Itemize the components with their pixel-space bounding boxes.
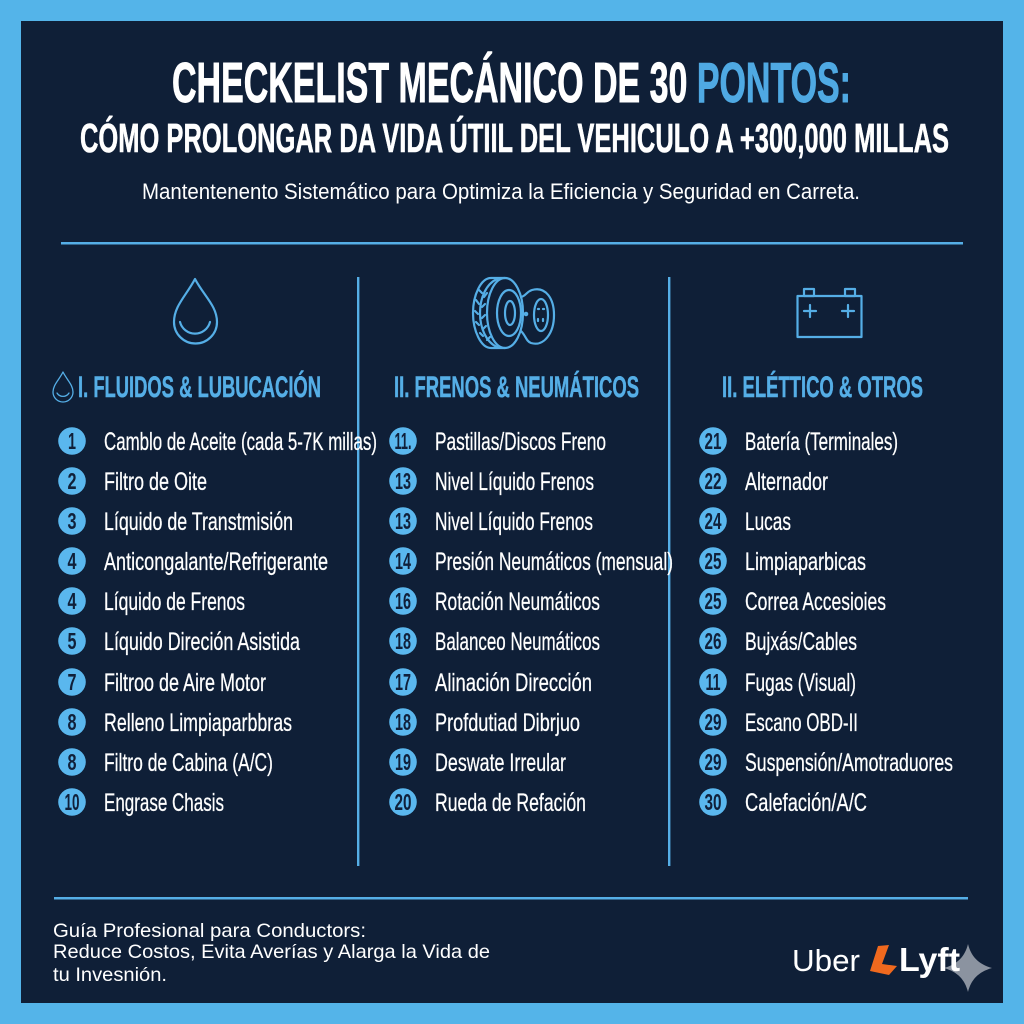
item 17: 17 [395, 669, 411, 695]
item 13b [389, 507, 593, 536]
item 10: 10 [64, 789, 80, 815]
item 11b [699, 668, 856, 697]
item 29b: 29 [704, 749, 722, 775]
item 22: Alternador [745, 468, 828, 496]
heading: frenos: II. FRENOS & NEUMÁTICOS [394, 370, 639, 404]
item 8b [58, 748, 273, 777]
footer text [53, 920, 490, 986]
item 4b: Líquido de Frenos [104, 588, 245, 616]
item 2: Filtro de Oite [104, 468, 207, 496]
icon: small water drop [53, 372, 73, 402]
item 22: 22 [704, 468, 722, 494]
item 8 [58, 708, 292, 737]
item 25b [699, 587, 886, 616]
item 7: Filtroo de Aire Motor [104, 669, 266, 697]
item 3: Líquido de Transtmisión [104, 508, 293, 536]
item 29b [699, 748, 953, 777]
item 25b: Correa Accesioies [745, 588, 886, 616]
footer text: tu Invesnión. [53, 964, 167, 986]
star mark [944, 944, 992, 992]
item 18b: 18 [395, 709, 411, 735]
item 30 [699, 788, 867, 817]
item 8b: 8 [68, 749, 77, 775]
item 5: 5 [68, 628, 77, 654]
item 4: Anticongalante/Refrigerante [104, 548, 328, 576]
Lyft icon [870, 945, 897, 975]
item 26: 26 [704, 628, 722, 654]
item 29 [699, 708, 858, 737]
item 7 [58, 668, 266, 697]
footer text: Guía Profesional para Conductors: [53, 920, 366, 942]
item 8b: Filtro de Cabina (A/C) [104, 749, 273, 777]
item 4: 4 [68, 548, 77, 574]
item 18b [389, 708, 580, 737]
item 14 [389, 547, 673, 576]
panel: fluidos [53, 279, 377, 817]
item 3: 3 [68, 508, 76, 534]
item 8: 8 [68, 709, 77, 735]
item 18b: Profdutiad Dibrjuo [435, 709, 580, 737]
item 7: 7 [68, 669, 76, 695]
item 19: 19 [395, 749, 411, 775]
item 16: 16 [395, 588, 411, 614]
item 13b: 13 [395, 508, 411, 534]
item 10: Engrase Chasis [104, 789, 224, 817]
item 18: 18 [395, 628, 411, 654]
panel: electrico [699, 289, 953, 817]
item 3 [58, 507, 293, 536]
item 11b: Fugas (Visual) [745, 669, 856, 697]
tagline: Mantentenento Sistemático para Optimiza la Eficiencia y Seguridad en Carreta. [142, 179, 860, 204]
item 22 [699, 467, 828, 496]
item 20 [389, 788, 586, 817]
item 21: Batería (Terminales) [745, 428, 898, 456]
Lyft wordmark: Lyft [899, 941, 960, 978]
item 13: 13 [395, 468, 411, 494]
item 21 [699, 427, 898, 456]
item 4b: 4 [68, 588, 77, 614]
item 26 [699, 627, 857, 656]
item 11b: 11 [706, 669, 721, 695]
item 24 [699, 507, 791, 536]
item 29: Escano OBD-II [745, 709, 858, 737]
icon: water drop [174, 279, 217, 344]
item 16 [389, 587, 600, 616]
item 20: Rueda de Refación [435, 789, 586, 817]
item 5: Líquido Direción Asistida [104, 628, 300, 656]
item 14: 14 [395, 548, 411, 574]
item 18 [389, 627, 600, 656]
item 8: Relleno Limpiaparbbras [104, 709, 292, 737]
item 20: 20 [394, 789, 412, 815]
Uber wordmark: Uber [792, 943, 860, 978]
item 11: Pastillas/Discos Freno [435, 428, 606, 456]
item 2: 2 [68, 468, 76, 494]
item 11 [389, 427, 606, 456]
item 4 [58, 547, 328, 576]
item 1: Camblo de Aceite (cada 5-7K millas) [104, 428, 377, 456]
item 5 [58, 627, 300, 656]
item 18: Balanceo Neumáticos [435, 628, 600, 656]
item 21: 21 [704, 428, 722, 454]
item 1: 1 [68, 428, 76, 454]
item 25: Limpiaparbicas [745, 548, 866, 576]
item 10 [58, 788, 224, 817]
icon: battery [798, 289, 862, 337]
logos: Uber and Lyft [792, 941, 992, 992]
item 30: 30 [704, 789, 722, 815]
item 24: 24 [704, 508, 722, 534]
item 24: Lucas [745, 508, 791, 536]
item 25 [699, 547, 866, 576]
item 14: Presión Neumáticos (mensual) [435, 548, 673, 576]
item 29: 29 [704, 709, 722, 735]
footer text: Reduce Costos, Evita Averías y Alarga la Vida de [53, 941, 490, 963]
heading: fluidos: I. FLUIDOS & LUBUCACIÓN [78, 370, 321, 404]
panel: frenos [389, 278, 673, 817]
item 4b [58, 587, 245, 616]
item 13b: Nivel Líquido Frenos [435, 508, 593, 536]
item 16: Rotación Neumáticos [435, 588, 600, 616]
item 11: 11. [394, 428, 412, 454]
item 2 [58, 467, 207, 496]
item 17 [389, 668, 592, 697]
title: CHECKELIST MECÁNICO DE 30 PONTOS: [172, 51, 851, 115]
item 26: Bujxás/Cables [745, 628, 857, 656]
icon: tire and brake disc [473, 278, 554, 348]
item 19 [389, 748, 566, 777]
item 19: Deswate Irreular [435, 749, 566, 777]
item 1 [58, 427, 377, 456]
item 13: Nivel Líquido Frenos [435, 468, 594, 496]
item 30: Calefación/A/C [745, 789, 867, 817]
item 25b: 25 [704, 588, 722, 614]
item 17: Alinación Dirección [435, 669, 592, 697]
item 13 [389, 467, 594, 496]
item 25: 25 [704, 548, 722, 574]
